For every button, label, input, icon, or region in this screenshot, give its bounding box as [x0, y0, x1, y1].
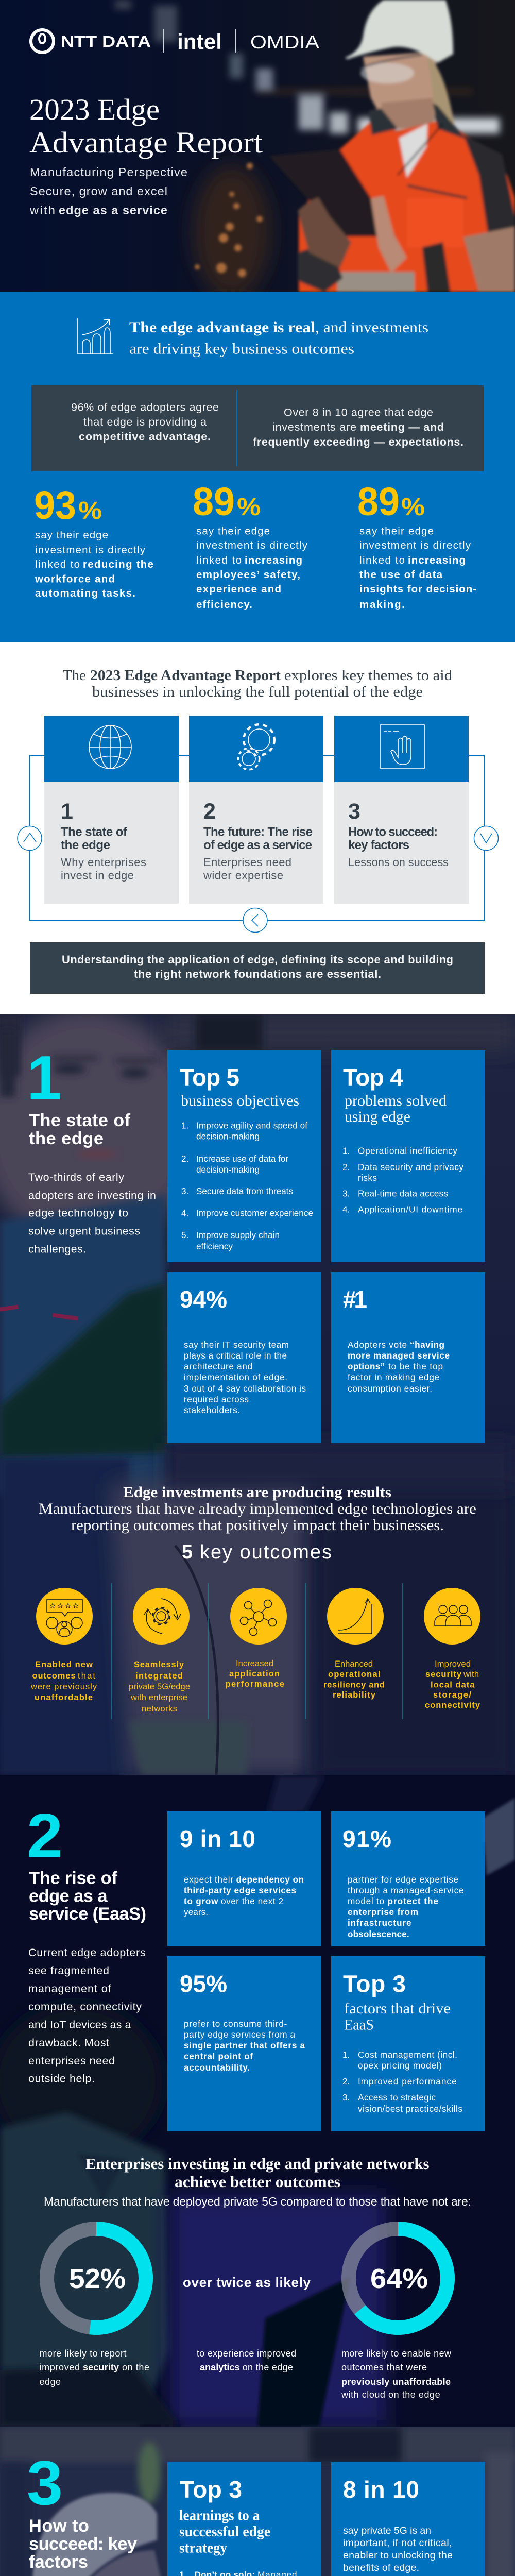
card 2: the future: The future: The rise	[203, 825, 313, 839]
section intro: outside help.	[28, 2073, 95, 2085]
panel: #1 managed services: consumption easier.	[348, 1383, 432, 1394]
stat: 89% safety: investment is directly	[196, 539, 308, 551]
panel: top 3 factors that drive EaaS: 2.	[342, 2076, 350, 2087]
panel: top 4 problems solved: problems solved	[345, 1092, 447, 1109]
panel: top 4 problems solved: 3.	[342, 1188, 350, 1198]
panel: 9 in 10: to grow	[184, 1896, 218, 1906]
stat: 89% safety: linked to	[196, 554, 242, 566]
outcome 5: security with local data: with	[463, 1670, 479, 1679]
stat: 93%: linked to	[35, 558, 80, 570]
panel: 8 in 10: enabler to unlocking the	[343, 2550, 453, 2561]
panel: 91%: partner for edge expertise	[348, 1874, 458, 1885]
background photo: woman in hard hat	[0, 2427, 515, 2576]
background photo: man with tablet	[0, 1010, 515, 1777]
text: over 8 in 10: frequently exceeding — expectations.	[253, 436, 464, 448]
section number: 2	[27, 1801, 63, 1871]
text: over 8 in 10: investments are	[272, 421, 356, 433]
icon: hand on window	[380, 724, 425, 769]
section intro	[28, 1946, 145, 2085]
panel: 8 in 10: benefits of edge.	[343, 2562, 419, 2573]
panel: top 3 factors that drive EaaS: EaaS	[344, 2016, 374, 2033]
stat: 89% safety: increasing	[245, 554, 302, 566]
panel: top 5 business objectives: Improve agility and speed of	[196, 1121, 307, 1131]
stat: 89% data insights: linked to	[359, 554, 405, 566]
heading: The edge advantage is real	[129, 319, 315, 336]
stat: over twice as likely	[183, 2275, 311, 2372]
donut chart: 52%: on the	[122, 2362, 149, 2372]
panel: top 5 business objectives: efficiency	[196, 1241, 233, 1251]
outcome 3: application performance	[226, 1588, 287, 1689]
panel: 95%: party edge services from a	[184, 2029, 295, 2040]
panel: top 4 problems solved: risks	[358, 1173, 377, 1183]
section intro: solve urgent business	[28, 1225, 140, 1238]
card 1: the state of the edge: The state of	[61, 825, 128, 839]
arrow: left	[243, 908, 267, 933]
outcome 5: security with local data: storage/	[433, 1690, 471, 1700]
section title	[29, 1111, 131, 1148]
panel: top 5 business objectives: decision-making	[196, 1131, 260, 1142]
panel: top 3 factors that drive EaaS: 3.	[342, 2092, 350, 2103]
stat: 89% safety: %	[237, 494, 261, 521]
panel: top 5 business objectives: 1.	[181, 1121, 188, 1131]
panel: 95%: accountability.	[184, 2062, 250, 2073]
panel: top 4 problems solved: 4.	[342, 1205, 350, 1215]
outcome 5: security with local data: Improved	[435, 1659, 471, 1669]
hero subtitle: edge as a service	[59, 204, 167, 217]
donut chart: 52%: edge	[39, 2377, 61, 2387]
donut chart: 64%: with cloud on the edge	[341, 2389, 440, 2400]
section number: 3	[27, 2448, 63, 2518]
panel: top 4 problems solved: Real-time data access	[358, 1188, 448, 1198]
section title: The rise of	[29, 1868, 117, 1888]
panel: 91%: through a managed-service	[348, 1885, 464, 1895]
callout: understanding the application of edge: Understanding the application of edge, defining its scope and building	[62, 953, 453, 966]
panel: #1 managed services: Adopters vote	[348, 1340, 407, 1350]
panel: top 3 learnings: learnings to a	[179, 2508, 260, 2524]
panel: 91%: infrastructure	[348, 1918, 411, 1928]
panel: 95%: single partner that offers a	[184, 2040, 305, 2050]
card 2: the future: Enterprises need	[203, 856, 291, 869]
panel: 94% security team: say their IT security team	[184, 1340, 289, 1350]
stat: 93%: 93	[34, 483, 76, 528]
stat: 89% safety: experience and	[196, 583, 281, 595]
section intro: enterprises need	[28, 2055, 115, 2067]
section intro: compute, connectivity	[28, 2001, 142, 2013]
text: 96% of adopters: competitive advantage.	[79, 431, 211, 443]
section intro: and IoT devices as a	[28, 2019, 131, 2031]
outcome 4: operational resiliency: operational	[328, 1670, 380, 1679]
icon: rating and people	[46, 1600, 82, 1637]
panel: 91%: enterprise from	[348, 1907, 418, 1917]
panel: #1 managed services	[331, 1272, 485, 1443]
heading: 2023 Edge Advantage Report	[90, 667, 281, 684]
panel: top 5 business objectives: Improve customer experience	[196, 1208, 313, 1218]
connector frame with arrows	[18, 755, 499, 933]
stat: 89% data insights: say their edge	[359, 526, 434, 537]
panel: top 3 learnings: successful edge	[179, 2524, 270, 2540]
donut chart: 52%	[39, 2229, 149, 2387]
panel: 94% security team: stakeholders.	[184, 1405, 240, 1415]
card 2: the future	[189, 716, 323, 904]
section intro: drawback. Most	[28, 2037, 109, 2049]
stat: 93%: say their edge	[35, 529, 108, 541]
card 1: the state of the edge	[44, 716, 179, 904]
card 3: how to succeed: key factors	[348, 838, 409, 852]
panel: the edge advantage is real	[0, 292, 515, 642]
heading: edge investments are producing results: Manufacturers that have already implemented edge technologies are	[39, 1500, 476, 1517]
panel: key themes	[0, 642, 515, 1014]
panel: top 4 problems solved: using edge	[345, 1108, 410, 1125]
section intro	[28, 1171, 156, 1256]
panel: top 3 factors that drive EaaS: Top 3	[343, 1971, 406, 1997]
icon: gears	[238, 725, 274, 769]
panel: 94% security team	[167, 1272, 321, 1443]
heading: edge investments are producing results: reporting outcomes that positively impact their businesses.	[71, 1517, 444, 1534]
section intro: see fragmented	[28, 1964, 109, 1977]
panel: top 5 business objectives: Increase use of data for	[196, 1154, 288, 1164]
panel: 9 in 10: dependency on	[236, 1874, 304, 1885]
section title: How to	[29, 2516, 89, 2536]
heading: edge investments are producing results: Edge investments are producing results	[123, 1484, 391, 1501]
text: over 8 in 10: Over 8 in 10 agree that edge	[284, 406, 433, 418]
heading: are driving key business outcomes	[129, 340, 354, 358]
section title: factors	[29, 2552, 88, 2572]
stat: over twice as likely: over twice as likely	[183, 2275, 311, 2290]
panel: top 5 business objectives: Top 5	[180, 1064, 239, 1091]
panel: 94% security team: plays a critical role in the	[184, 1350, 287, 1361]
panel: 94% security team: required across	[184, 1394, 249, 1404]
card 1: the state of the edge: the edge	[61, 838, 110, 852]
callout: competitive advantage and expectations	[31, 385, 484, 471]
panel: top 5 business objectives	[167, 1050, 321, 1262]
stat: 89% data insights: %	[401, 494, 425, 521]
panel: 9 in 10: 9 in 10	[180, 1825, 255, 1852]
outcome 2: integrated networks: with enterprise	[130, 1693, 187, 1702]
outcome 5: security with local data	[424, 1588, 480, 1710]
heading: The	[63, 667, 86, 684]
stat: 89% safety: efficiency.	[196, 599, 252, 611]
panel: top 3 factors that drive EaaS: Access to strategic	[358, 2092, 436, 2103]
hero title: Advantage Report	[29, 126, 263, 159]
panel: top 5 business objectives: 5.	[181, 1230, 188, 1240]
donut chart: 52%: security	[83, 2362, 119, 2372]
card 2: the future: of edge as a service	[203, 838, 312, 852]
panel: 91%: obsolescence.	[348, 1929, 409, 1939]
panel: top 4 problems solved: Top 4	[343, 1064, 403, 1091]
outcome 2: integrated networks: Seamlessly	[134, 1660, 184, 1669]
panel: #1 managed services: #1	[343, 1286, 367, 1313]
panel: 91%	[331, 1811, 485, 1946]
hero subtitle	[29, 165, 187, 217]
donut chart: 52%: 52%	[69, 2263, 126, 2294]
card 3: how to succeed: Lessons on success	[348, 856, 449, 869]
stat: 89% safety	[193, 480, 308, 611]
card 2: the future: wider expertise	[203, 869, 283, 882]
subheading: Manufacturers that have deployed private 5G compared to those that have not are:	[44, 2195, 471, 2208]
outcome 4: operational resiliency: reliability	[333, 1690, 376, 1700]
icon: gear loop	[144, 1599, 181, 1634]
outcome 2: integrated networks: private 5G/edge	[129, 1682, 190, 1691]
panel: #1 managed services: more managed service	[348, 1350, 450, 1361]
text: 96% of adopters: 96% of edge adopters agree	[71, 401, 219, 413]
donut chart: 64%: 64%	[370, 2263, 428, 2294]
logo: Omdia: OMDIA	[250, 31, 319, 53]
callout: understanding the application of edge	[30, 942, 485, 994]
outcome 4: operational resiliency: Enhanced	[335, 1659, 373, 1669]
stat: 89% data insights	[357, 480, 476, 611]
panel: 9 in 10: third-party edge services	[184, 1885, 296, 1895]
panel: top 3 factors that drive EaaS: factors that drive	[344, 2000, 451, 2017]
section title: edge as a	[29, 1887, 108, 1906]
logo: NTT DATA	[31, 30, 151, 53]
outcome 1: new outcomes: Enabled new	[35, 1660, 93, 1669]
hero photo: engineer with tablet	[0, 0, 515, 299]
panel: 95%	[167, 1956, 321, 2131]
section intro: adopters are investing in	[28, 1189, 156, 1201]
panel: top 5 business objectives: decision-making	[196, 1164, 260, 1175]
outcome 4: operational resiliency	[323, 1588, 385, 1700]
heading	[63, 667, 453, 700]
arrow: down	[474, 826, 499, 850]
panel: top 4 problems solved: Data security and privacy	[358, 1162, 464, 1172]
stat: over twice as likely: analytics	[200, 2362, 240, 2372]
panel: top 5 business objectives: 2.	[181, 1154, 188, 1164]
panel: 94% security team: 94%	[180, 1286, 227, 1313]
panel: 9 in 10: over the next 2	[221, 1896, 283, 1906]
panel: 95%: prefer to consume third-	[184, 2019, 287, 2029]
panel: #1 managed services: factor in making edge	[348, 1372, 439, 1382]
donut chart: 64%: outcomes that were	[341, 2362, 427, 2372]
text: 96% of adopters: that edge is providing a	[83, 416, 207, 428]
panel: top 5 business objectives: 4.	[181, 1208, 188, 1218]
section title: the edge	[29, 1129, 104, 1148]
outcome 4: operational resiliency: resiliency and	[323, 1681, 385, 1690]
heading: enterprises investing: achieve better outcomes	[175, 2173, 340, 2191]
outcome 3: application performance: Increased	[236, 1659, 273, 1668]
panel: top 4 problems solved: Application/UI downtime	[358, 1205, 462, 1215]
card 2: the future: 2	[203, 799, 216, 824]
panel: top 3 learnings: Top 3	[180, 2476, 242, 2503]
panel: #1 managed services: options”	[348, 1361, 385, 1371]
stat: 89% safety: employees’ safety,	[196, 569, 300, 581]
text: over 8 in 10: meeting — and	[360, 421, 444, 433]
heading: 5 key outcomes: key outcomes	[200, 1541, 332, 1563]
text: 96% of adopters	[71, 401, 219, 443]
section 2: the rise of edge as a service	[0, 1775, 515, 2427]
card 3: how to succeed: How to succeed:	[348, 825, 438, 839]
outcome 1: new outcomes: that	[78, 1671, 95, 1681]
section title: service (EaaS)	[29, 1904, 146, 1924]
panel: 8 in 10: say private 5G is an	[343, 2525, 431, 2536]
panel: top 3 learnings: strategy	[179, 2540, 227, 2556]
stat: 89% data insights: the use of data	[359, 569, 443, 581]
hero subtitle: Secure, grow and excel	[30, 184, 167, 198]
heading: 5 key outcomes: 5	[182, 1541, 193, 1563]
arrow: up	[18, 826, 42, 850]
hero title	[29, 93, 263, 159]
outcome 2: integrated networks: integrated	[135, 1671, 183, 1681]
heading	[129, 319, 428, 358]
panel: top 3 factors that drive EaaS: 1.	[342, 2049, 350, 2060]
stat: 93%: automating tasks.	[35, 587, 135, 599]
panel: 94% security team: implementation of edge.	[184, 1372, 287, 1382]
stat: 89% data insights: 89	[357, 480, 400, 524]
icon: people group	[435, 1605, 471, 1626]
outcome 2: integrated networks: networks	[142, 1704, 177, 1714]
panel: top 3 learnings	[167, 2462, 321, 2576]
panel: top 3 factors that drive EaaS: opex pricing model)	[358, 2060, 442, 2071]
heading: edge investments are producing results	[39, 1484, 476, 1534]
heading: businesses in unlocking the full potential of the edge	[92, 684, 423, 700]
outcome dividers	[112, 1583, 403, 1719]
stat: 93%: workforce and	[35, 573, 115, 585]
donut chart: 64%: more likely to enable new	[341, 2348, 452, 2359]
card 1: the state of the edge: Why enterprises	[61, 856, 146, 869]
panel: 8 in 10: 8 in 10	[343, 2476, 419, 2503]
stat: 89% data insights: increasing	[408, 554, 466, 566]
stat: over twice as likely: on the edge	[243, 2362, 293, 2372]
outcome 3: application performance: performance	[226, 1680, 284, 1689]
panel: 9 in 10: expect their	[184, 1874, 233, 1885]
outcome 1: new outcomes: were previously	[30, 1682, 97, 1691]
card 1: the state of the edge: invest in edge	[61, 869, 134, 882]
panel: top 5 business objectives: Secure data from threats	[196, 1186, 293, 1196]
stat: 93%: %	[78, 497, 102, 524]
panel: 8 in 10	[331, 2462, 485, 2576]
stat: 89% safety: 89	[193, 480, 235, 524]
section intro: challenges.	[28, 1243, 86, 1256]
outcome 2: integrated networks	[129, 1588, 190, 1714]
stat: 89% safety: say their edge	[196, 526, 270, 537]
stat: 89% data insights: making.	[359, 599, 405, 611]
card 3: how to succeed: 3	[348, 799, 360, 824]
panel: 9 in 10: years.	[184, 1907, 208, 1917]
stat: over twice as likely: to experience improved	[197, 2348, 296, 2359]
heading: explores key themes to aid	[284, 667, 453, 684]
panel: top 3 factors that drive EaaS: Improved performance	[358, 2076, 456, 2087]
section title: succeed: key	[29, 2534, 137, 2554]
panel: top 5 business objectives: Improve supply chain	[196, 1230, 280, 1240]
section intro: edge technology to	[28, 1207, 128, 1219]
hero title: 2023 Edge	[29, 93, 160, 126]
logo: intel: intel	[177, 29, 222, 54]
outcome 1: new outcomes: unaffordable	[35, 1693, 93, 1702]
icon: growth curve	[338, 1599, 372, 1634]
section intro: management of	[28, 1982, 111, 1995]
section title	[29, 2516, 137, 2572]
outcome 5: security with local data: security	[425, 1670, 462, 1679]
donut chart: 52%: more likely to report	[39, 2348, 127, 2359]
panel: top 4 problems solved: Operational inefficiency	[358, 1146, 457, 1156]
donut chart: 64%: previously unaffordable	[341, 2377, 451, 2387]
panel: top 4 problems solved: 2.	[342, 1162, 350, 1172]
outcome 1: new outcomes	[30, 1588, 97, 1702]
section intro: Two-thirds of early	[28, 1171, 124, 1183]
heading: enterprises investing: Enterprises investing in edge and private networks	[85, 2155, 430, 2173]
icon: network nodes	[240, 1600, 276, 1635]
background photo: man in server room	[0, 1775, 515, 2427]
panel: 95%: 95%	[180, 1971, 227, 1997]
panel: 91%: protect the	[387, 1896, 438, 1906]
panel: top 4 problems solved	[331, 1050, 485, 1262]
panel: top 3 factors that drive EaaS: vision/best practice/skills	[358, 2104, 462, 2114]
panel: top 3 factors that drive EaaS	[331, 1956, 485, 2131]
section title: The state of	[29, 1111, 131, 1130]
panel: top 3 factors that drive EaaS: Cost management (incl.	[358, 2049, 457, 2060]
outcome 5: security with local data: connectivity	[425, 1701, 480, 1710]
card 3: how to succeed	[334, 716, 469, 904]
stat: 93%: reducing the	[83, 558, 153, 570]
outcome 5: security with local data: local data	[431, 1681, 475, 1690]
text: over 8 in 10	[253, 406, 464, 448]
panel: top 5 business objectives: 3.	[181, 1186, 188, 1196]
outcome 3: application performance: application	[229, 1669, 280, 1679]
section intro: Current edge adopters	[28, 1946, 145, 1959]
icon: globe	[89, 725, 131, 769]
panel: 9 in 10	[167, 1811, 321, 1946]
donut chart: 64%	[341, 2229, 452, 2400]
panel: 91%: 91%	[342, 1825, 391, 1852]
outcome 1: new outcomes: outcomes	[32, 1671, 75, 1681]
section 3: how to succeed	[0, 2427, 515, 2576]
donut chart: 52%: improved	[39, 2362, 80, 2372]
logo: NTT DATA: NTT DATA	[61, 32, 151, 50]
panel: 95%: central point of	[184, 2051, 253, 2061]
section 1: the state of the edge	[0, 1010, 515, 1777]
heading: enterprises investing	[85, 2155, 430, 2191]
panel: top 4 problems solved: 1.	[342, 1146, 350, 1156]
card 1: the state of the edge: 1	[61, 799, 73, 824]
panel: 8 in 10: important, if not critical,	[343, 2537, 452, 2549]
section title	[29, 1868, 146, 1924]
icon: rising bar chart	[78, 318, 113, 354]
callout: understanding the application of edge: the right network foundations are essential.	[134, 968, 381, 980]
panel: 94% security team: architecture and	[184, 1361, 252, 1371]
panel: top 5 business objectives: business objectives	[181, 1092, 299, 1109]
hero panel	[0, 0, 515, 299]
panel: #1 managed services: to be the top	[388, 1361, 443, 1371]
hero subtitle: with	[29, 204, 55, 217]
stat: 89% data insights: investment is directly	[359, 539, 471, 551]
hero subtitle: Manufacturing Perspective	[30, 165, 187, 179]
panel: 91%: model to	[348, 1896, 384, 1906]
section number: 1	[27, 1043, 62, 1113]
stat: 93%: investment is directly	[35, 544, 146, 556]
heading: , and investments	[315, 319, 428, 336]
panel: 94% security team: 3 out of 4 say collaboration is	[184, 1383, 306, 1394]
stat: 89% data insights: insights for decision-	[359, 583, 476, 595]
panel: #1 managed services: “having	[410, 1340, 444, 1350]
stat: 93%	[34, 483, 153, 599]
